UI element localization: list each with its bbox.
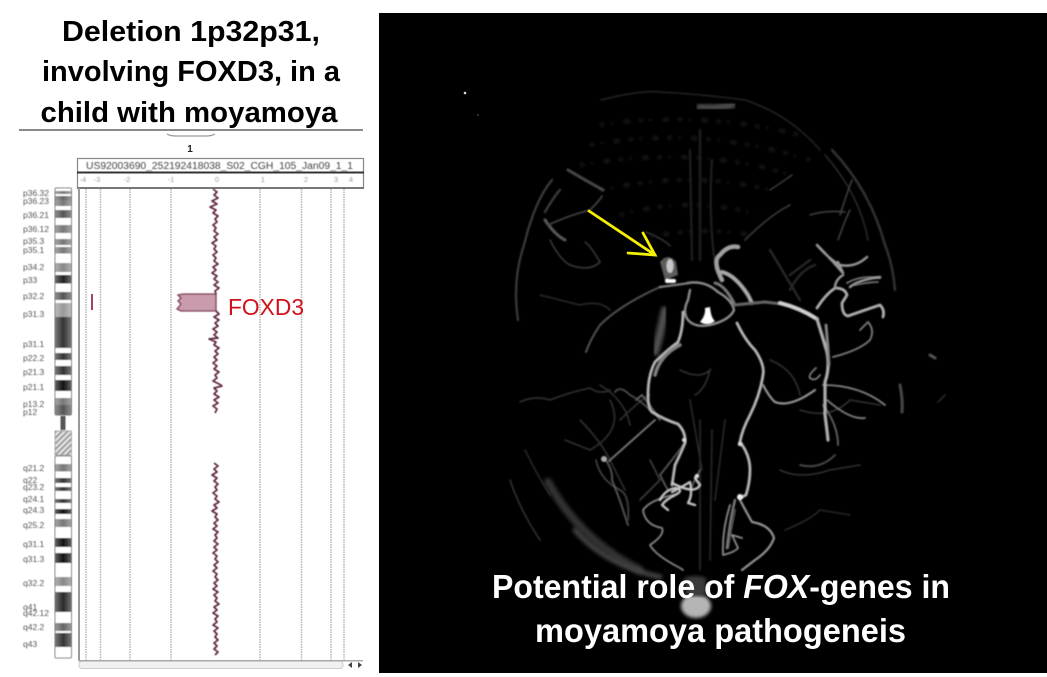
- chromosome number: 1: [187, 144, 193, 155]
- cytoband labels: q21.2: [23, 463, 45, 473]
- panel: MR angiogram: [379, 13, 1047, 673]
- cytoband labels: q23.2: [23, 482, 45, 492]
- cytoband labels: q41: [23, 602, 37, 612]
- cytoband labels: q31.1: [23, 539, 45, 549]
- cytoband labels: q42.2: [23, 622, 45, 632]
- plot header: 0: [215, 175, 219, 184]
- cytoband labels: p36.32: [23, 188, 49, 198]
- cytoband labels: p31.3: [23, 309, 45, 319]
- cytoband labels: p12: [23, 407, 37, 417]
- cytoband labels: p22.2: [23, 353, 45, 363]
- cytoband labels: q42.12: [23, 608, 49, 618]
- yellow arrow: [589, 211, 655, 255]
- log ratio trace: [209, 189, 222, 655]
- deletion region: [177, 294, 216, 311]
- cytoband labels: q24.1: [23, 494, 45, 504]
- plot frame and grid: [78, 188, 363, 662]
- faint scalp vessels: [510, 92, 945, 577]
- cytoband labels: p21.3: [23, 367, 45, 377]
- bright blob at occiput: [681, 576, 711, 618]
- plot header: -2: [124, 175, 130, 184]
- scroll bar: [79, 662, 362, 668]
- cytoband labels: p34.2: [23, 262, 45, 272]
- cytoband labels: p35.3: [23, 236, 45, 246]
- cytoband labels: q24.3: [23, 505, 45, 515]
- caption: moyamoya pathogeneis: [535, 612, 906, 649]
- chromosome ideogram: [55, 188, 72, 658]
- panel: array CGH chromosome 1 plot: [19, 129, 364, 668]
- title: Deletion 1p32p31,: [62, 16, 320, 48]
- plot header: 3: [334, 175, 338, 184]
- cytoband labels: p33: [23, 275, 37, 285]
- chromosome bracket: [167, 134, 215, 136]
- cytoband labels: p36.23: [23, 196, 49, 206]
- cytoband labels: p32.2: [23, 291, 45, 301]
- plot header: -4: [80, 175, 86, 184]
- plot header: -3: [94, 175, 100, 184]
- plot header: 2: [304, 175, 308, 184]
- cytoband labels: q22: [23, 475, 37, 485]
- cytoband labels: p21.1: [23, 382, 45, 392]
- cytoband labels: q25.2: [23, 520, 45, 530]
- bright flow spots: [601, 257, 743, 500]
- plot header: -1: [168, 175, 174, 184]
- cytoband labels: p36.12: [23, 224, 49, 234]
- plot header: 1: [261, 175, 265, 184]
- caption: Potential role of FOX-genes in: [492, 568, 950, 605]
- star artefacts: [464, 92, 479, 116]
- speckled frontal texture: [580, 119, 810, 240]
- head silhouette: [519, 104, 885, 612]
- title: child with moyamoya: [40, 97, 338, 129]
- cytoband labels: p36.21: [23, 210, 49, 220]
- plot header: [77, 158, 364, 189]
- cytoband labels: p13.2: [23, 399, 45, 409]
- medium-bright branches: [605, 245, 885, 570]
- cytoband labels: q31.3: [23, 554, 45, 564]
- cytoband labels: p35.1: [23, 245, 45, 255]
- title: involving FOXD3, in a: [42, 56, 341, 88]
- cytoband labels: q43: [23, 639, 37, 649]
- caption: [492, 568, 950, 649]
- cytoband labels: p31.1: [23, 339, 45, 349]
- plot header: 4: [349, 175, 353, 184]
- cytoband labels: q32.2: [23, 578, 45, 588]
- plot header: US92003690_252192418038_S02_CGH_105_Jan09_1_1: [86, 161, 353, 172]
- FOXD3 label: FOXD3: [228, 294, 304, 320]
- title: [40, 16, 341, 129]
- bright main arteries: [648, 247, 884, 570]
- cytoband labels: [23, 188, 49, 649]
- red deletion marker: [91, 294, 93, 310]
